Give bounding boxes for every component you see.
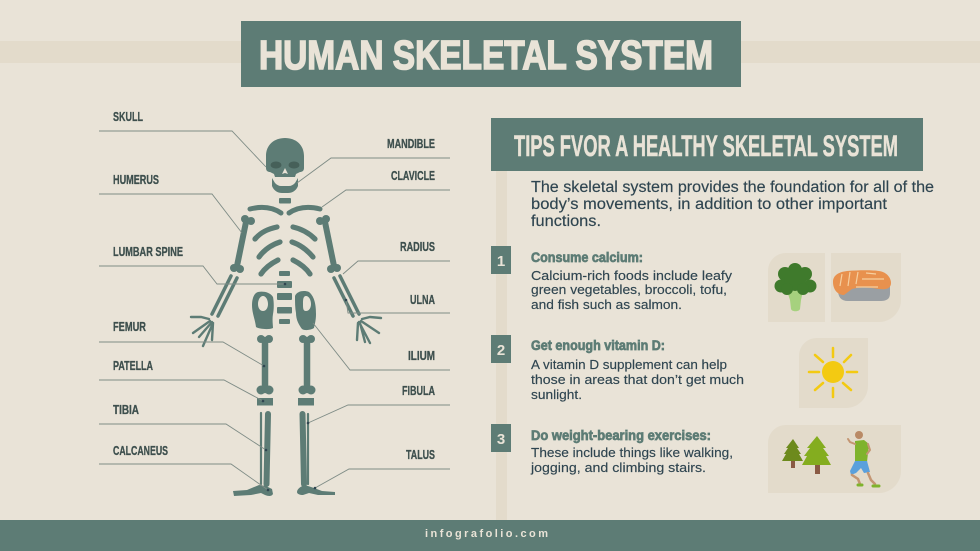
- tip 2: Get enough vitamin D:: [531, 338, 665, 353]
- left hand: [191, 317, 213, 346]
- icon: sun: [799, 338, 868, 408]
- feet: [233, 485, 335, 496]
- tip 3: These include things like walking,: [531, 445, 733, 460]
- patellas: [257, 398, 314, 406]
- tip 1: green vegetables, broccoli, tofu,: [531, 282, 727, 297]
- icon: salmon: [831, 253, 901, 322]
- footer bar: [0, 520, 980, 551]
- leader lines: [99, 131, 450, 490]
- spine and neck: [277, 198, 292, 324]
- clavicles: [250, 207, 320, 213]
- skeleton figure: [191, 138, 381, 496]
- bone labels: CLAVICLE: [391, 169, 435, 183]
- ilium bones: [252, 291, 316, 330]
- title banner: HUMAN SKELETAL SYSTEM: [259, 32, 713, 78]
- tip 2: 2: [497, 342, 505, 359]
- bone labels: FEMUR: [113, 320, 146, 334]
- intro text: The skeletal system provides the foundation for all of the: [531, 179, 934, 196]
- tip 1: [491, 246, 733, 312]
- title banner: [241, 21, 741, 87]
- bone labels: SKULL: [113, 110, 143, 124]
- leader dots: [262, 283, 347, 491]
- bone labels: TIBIA: [113, 403, 139, 417]
- right hand: [357, 317, 381, 343]
- tip 3: [491, 424, 733, 475]
- bone labels: CALCANEUS: [113, 444, 168, 458]
- tip 2: sunlight.: [531, 387, 582, 402]
- bone labels: HUMERUS: [113, 173, 159, 187]
- skull: [266, 138, 304, 193]
- bone labels: TALUS: [406, 448, 435, 462]
- icon: broccoli: [768, 253, 825, 322]
- bone labels: ILIUM: [408, 349, 435, 363]
- tip 3: jogging, and climbing stairs.: [530, 460, 706, 475]
- tip 1: and fish such as salmon.: [531, 297, 682, 312]
- bone labels: ULNA: [410, 293, 435, 307]
- tip 1: Consume calcium:: [531, 250, 643, 265]
- legs: [256, 335, 316, 484]
- intro text: body’s movements, in addition to other important: [531, 196, 888, 213]
- bone labels: RADIUS: [400, 240, 435, 254]
- tip 1: Calcium-rich foods include leafy: [531, 268, 733, 283]
- tip 2: A vitamin D supplement can help: [531, 357, 727, 372]
- arms: [212, 215, 359, 316]
- tip 1: 1: [497, 253, 505, 270]
- tip 3: 3: [497, 431, 505, 448]
- icon: trees and runner: [768, 425, 901, 493]
- tip 2: those in areas that don’t get much: [531, 372, 744, 387]
- bone labels: FIBULA: [402, 384, 435, 398]
- tip 3: Do weight-bearing exercises:: [531, 428, 711, 443]
- tips heading: [491, 118, 923, 171]
- ribs: [255, 227, 315, 274]
- intro text: functions.: [531, 213, 601, 230]
- bone labels: LUMBAR SPINE: [113, 245, 183, 259]
- intro text: [531, 179, 934, 230]
- footer bar: infografolio.com: [425, 528, 548, 540]
- bone labels: MANDIBLE: [387, 137, 435, 151]
- tip 2: [491, 335, 744, 402]
- bone labels: [113, 110, 435, 462]
- bone labels: PATELLA: [113, 359, 153, 373]
